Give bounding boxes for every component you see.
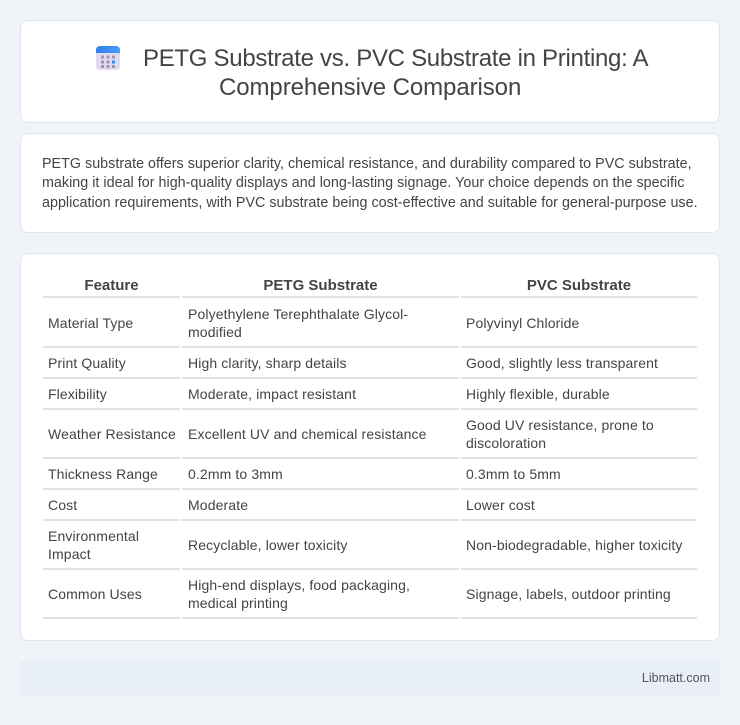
row: Thickness Range: Thickness Range [48,466,158,482]
table: Recyclable, lower toxicity [188,537,348,553]
row: Environmental Impact [48,528,139,562]
table: Moderate, impact resistant [188,386,356,402]
table: 0.2mm to 3mm [188,466,283,482]
row: Material Type: Material Type [48,315,133,331]
table: Signage, labels, outdoor printing [466,586,671,602]
title: Comprehensive Comparison [219,74,521,101]
intro text: application requirements, with PVC substrate being cost-effective and suitable for general-purpose use. [42,195,698,211]
intro text: PETG substrate offers superior clarity, chemical resistance, and durability compared to PVC substrate, [42,156,692,172]
column header: Feature: Feature [84,277,139,294]
table: Excellent UV and chemical resistance [188,426,427,442]
panel: comparison table [20,253,720,641]
table: medical printing [188,595,288,611]
icon: calendar grid [96,46,120,70]
table: Moderate [188,497,248,513]
row: Cost: Cost [48,497,77,513]
table: Good UV resistance, prone to [466,417,654,433]
title [143,45,648,101]
column header: PVC Substrate: PVC Substrate [527,277,631,294]
title: PETG Substrate vs. PVC Substrate in Printing: A [143,45,648,72]
table: High clarity, sharp details [188,355,347,371]
table: Good, slightly less transparent [466,355,658,371]
column header: PETG Substrate: PETG Substrate [263,277,378,294]
table: Polyvinyl Chloride [466,315,579,331]
intro text: making it ideal for high-quality displays and long-lasting signage. Your choice depends on the specific [42,175,684,191]
table: Lower cost [466,497,535,513]
table: discoloration [466,435,546,451]
row: Weather Resistance: Weather Resistance [48,426,176,442]
intro text [42,156,698,211]
table: Highly flexible, durable [466,386,610,402]
table: modified [188,324,242,340]
row: Print Quality: Print Quality [48,355,126,371]
row: Environmental Impact: Impact [48,546,91,562]
footer [20,661,720,695]
table: Non-biodegradable, higher toxicity [466,537,683,553]
footer credit: Libmatt.com [642,671,710,685]
table: High-end displays, food packaging, [188,577,410,593]
row: Common Uses: Common Uses [48,586,142,602]
row: Environmental Impact: Environmental [48,528,139,544]
table: Polyethylene Terephthalate Glycol- [188,306,408,322]
row: Flexibility: Flexibility [48,386,107,402]
panel: introduction [20,133,720,233]
panel: header [20,20,720,123]
table: 0.3mm to 5mm [466,466,561,482]
